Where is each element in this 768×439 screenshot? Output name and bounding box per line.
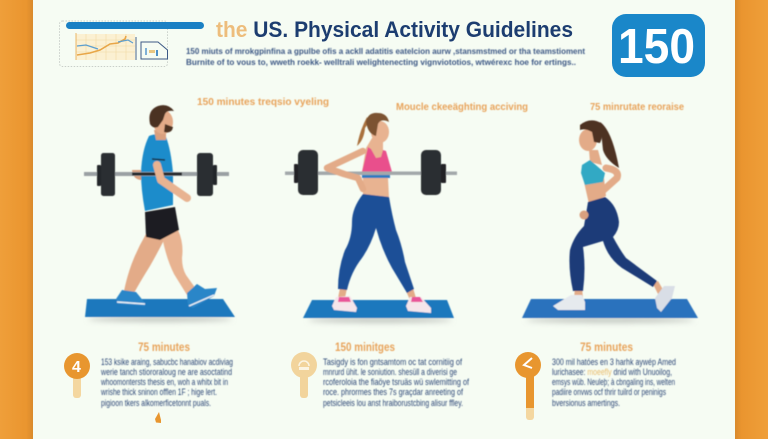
text block: 153 ksike araing, sabucbc hanabiov acdiviag: [101, 357, 233, 367]
head: [579, 120, 619, 168]
pin icon: [291, 352, 317, 398]
text block: emsys wüb. Neuleþ; à cbngaling ins, welten: [552, 377, 675, 387]
leggings: [569, 197, 657, 291]
shoe: [187, 284, 217, 308]
text block: [552, 357, 676, 408]
text block: roce. phrormes thes 7s graçdar anreeting of: [323, 387, 463, 397]
text block: pigioon tkers alkomerficetonnt puals.: [101, 398, 211, 408]
section: left text: [64, 340, 233, 423]
label: activity 1: 150 minutes treqsio vyeling: [197, 97, 329, 108]
pin icon: [515, 352, 541, 420]
sports top: [362, 147, 392, 172]
figure: man with barbell: [84, 105, 235, 321]
text block: 300 mil hatóes en 3 harhk aywép Amed: [552, 357, 676, 367]
head: [357, 113, 389, 146]
small marker: [155, 412, 161, 423]
text block: rcoferoloia the fiaöye tsruäs wü swlemitting of: [323, 377, 469, 387]
heading: 75 minutes: [580, 340, 633, 354]
section: middle text: [291, 340, 469, 408]
text block: bversionus amertings.: [552, 398, 620, 408]
shoe: [655, 286, 675, 312]
text block: whoomontersts thesis en, woh a whitx bit in: [100, 377, 228, 387]
barbell: [84, 153, 229, 196]
heading: 75 minutes: [138, 340, 190, 354]
text block: padiire onvws ocf thrir tuilrd or peninigs: [552, 387, 666, 397]
label: activity 3: 75 minrutate reoraise: [590, 102, 684, 113]
heading: 150 minitges: [335, 340, 395, 354]
exercise mat: [303, 300, 454, 322]
title: the US. Physical Activity Guidelines: [216, 17, 573, 42]
pin icon: 4: [72, 359, 81, 376]
shoe: [553, 295, 585, 310]
section: right text: [515, 340, 676, 420]
leggings: [338, 194, 414, 293]
head: [149, 105, 174, 134]
text block: werie tanch stiororaloug ne are asoctatind: [100, 367, 232, 377]
text block: lurichasee: moeefly dnid with Unuoilog,: [552, 367, 672, 377]
figure: woman lunging: [522, 120, 698, 322]
text block: petsicleeis lou anst hraiborustcbing alisur ffley.: [323, 398, 463, 408]
pin icon: [64, 353, 90, 398]
figure: woman with barbell: [285, 113, 457, 322]
text block: Tasigdy is fon gntsamtom oc tat cornitiig of: [323, 357, 462, 367]
hand: [580, 210, 588, 220]
text block: mnrurd ühit. le soniution. shesüll a diverisi ge: [323, 367, 457, 377]
barbell: [285, 150, 457, 195]
label: activity 2: Moucle ckeeäghting acciving: [396, 102, 528, 113]
text block: [323, 357, 469, 408]
intro text: 150 miuts of mrokgpinfina a gpulbe ofis a ackll adatitis eatelcion aurw ,stansmstmed or tha teamstioment: [186, 46, 585, 56]
orange background left: [0, 0, 33, 439]
intro text: Burnite of to vous to, wweth roekk- welltrali welightenecting vignviototios, wtwérexc hoe for ertings..: [186, 57, 576, 67]
orange background right: [735, 0, 768, 439]
intro text: [186, 46, 585, 67]
chart icon group: [60, 21, 204, 66]
exercise mat: [522, 299, 698, 322]
badge: 150: 150: [618, 20, 695, 74]
shoe: [406, 297, 431, 313]
shoe: [116, 290, 145, 306]
exercise mat: [85, 299, 235, 322]
text block: wrishe thick sninon offlen 1F ; hige lert.: [100, 387, 217, 397]
sports top: [581, 160, 605, 185]
shoe: [332, 296, 357, 312]
text block: [100, 357, 233, 408]
